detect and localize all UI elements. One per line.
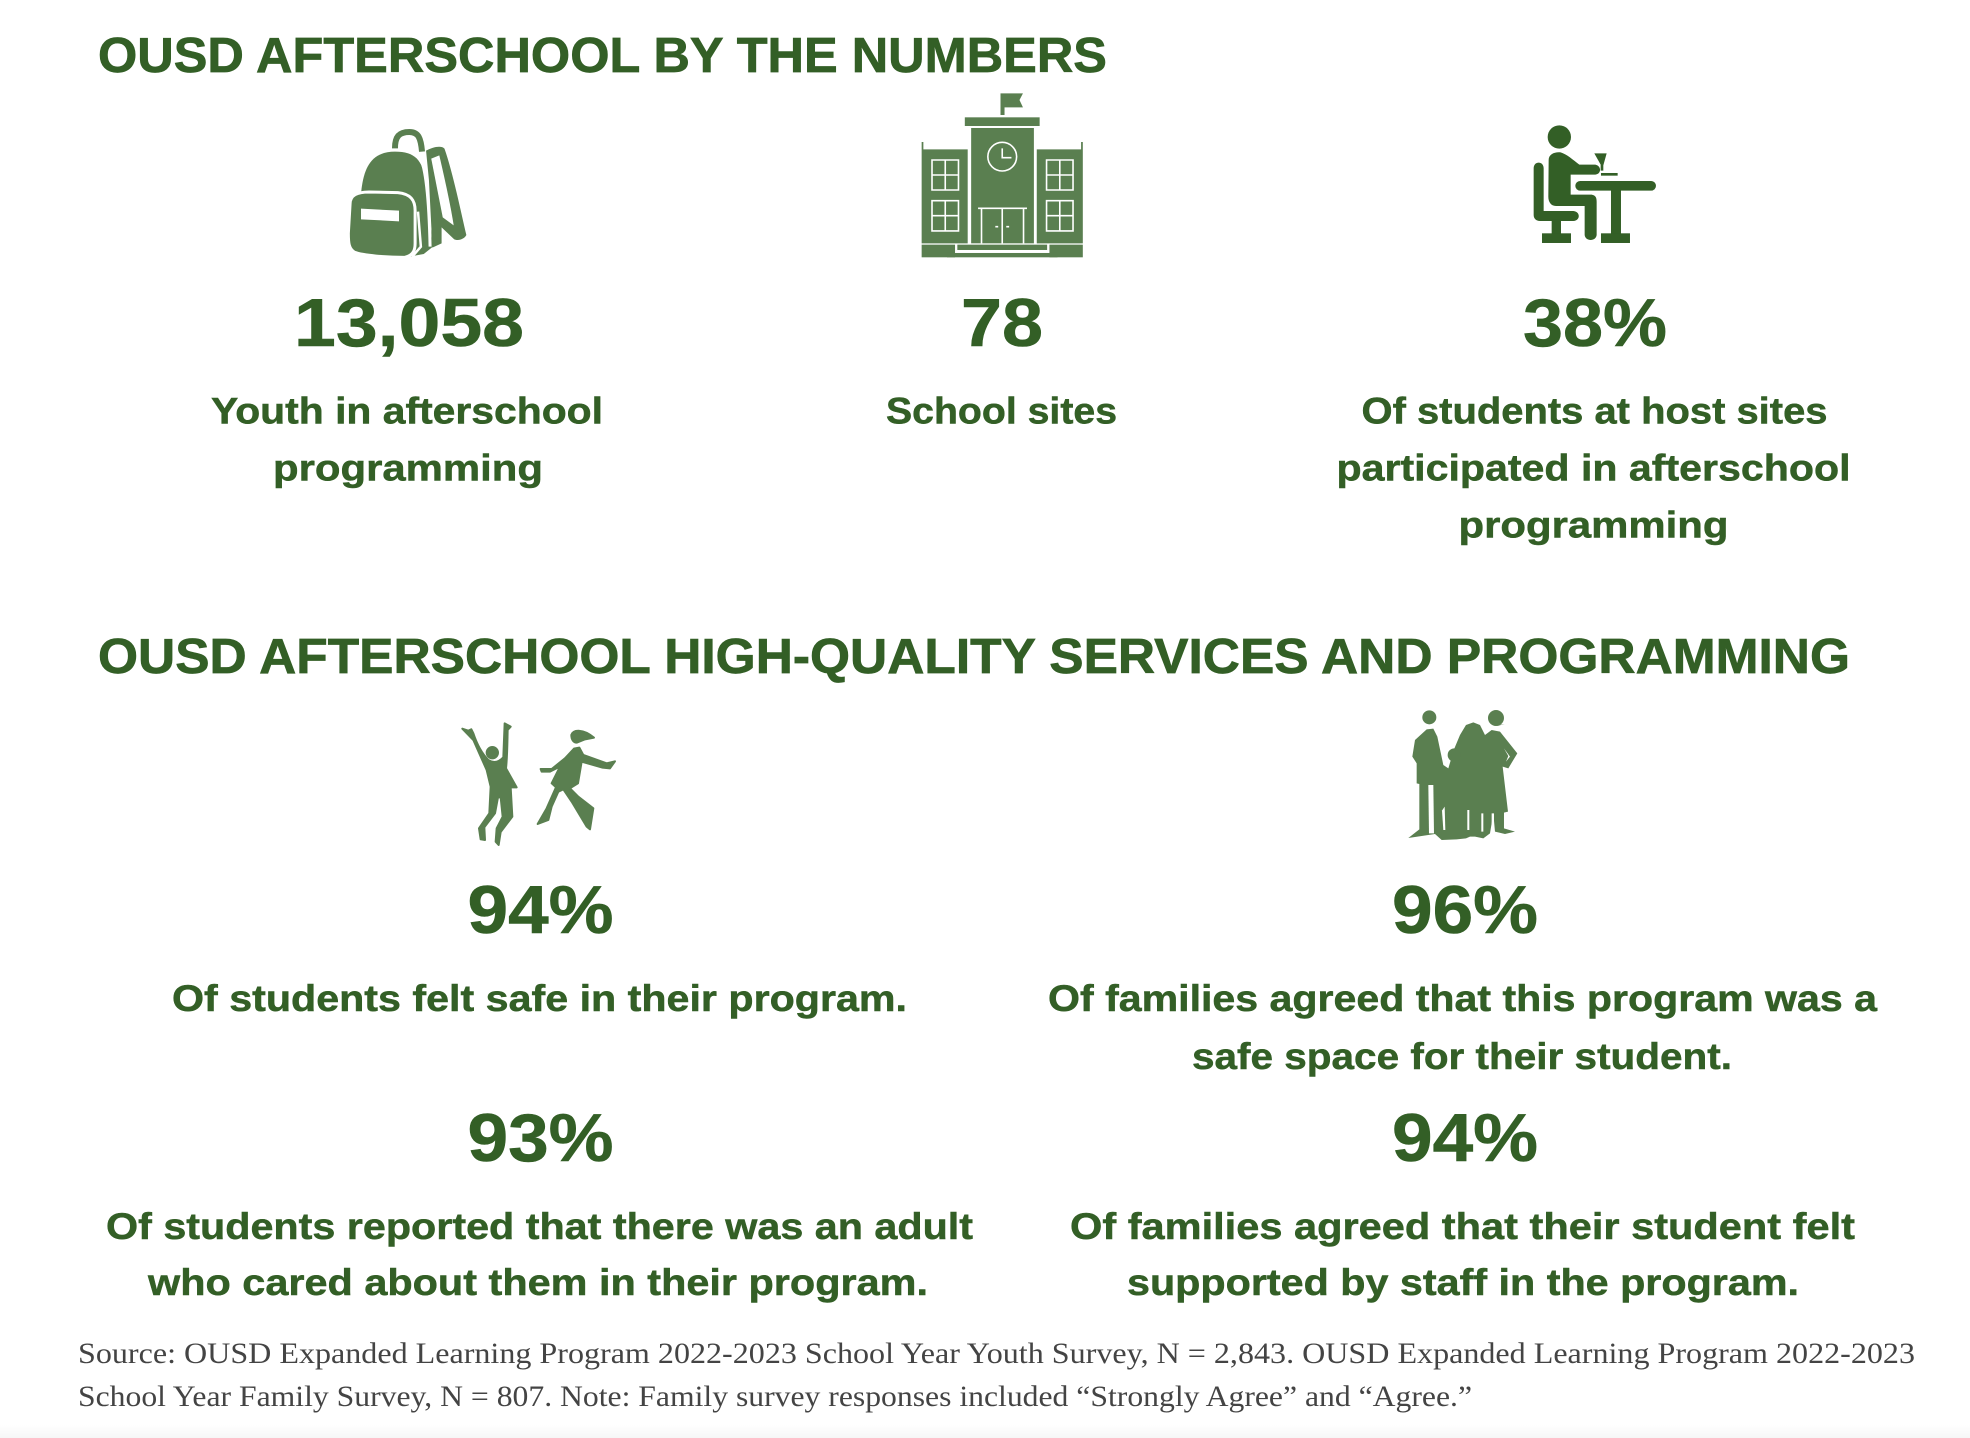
label: safe space bbox=[1048, 978, 1877, 1077]
panel: school sites bbox=[886, 93, 1117, 432]
stat: 96%: 96% bbox=[1392, 872, 1538, 948]
label: supported by staff: supported by staff in the program. bbox=[1127, 1262, 1799, 1303]
icon: person at desk bbox=[1534, 125, 1656, 243]
icon: jumping children bbox=[462, 723, 615, 845]
panel: host site participation bbox=[1336, 125, 1850, 545]
icon: family silhouette bbox=[1408, 710, 1517, 840]
label: of students at host sites: participated in afterschool bbox=[1336, 448, 1850, 488]
label: school sites: School sites bbox=[886, 390, 1117, 432]
icon: school building bbox=[922, 93, 1083, 257]
label: safe space: safe space for their student. bbox=[1192, 1036, 1732, 1077]
panel: students bbox=[106, 723, 973, 1303]
icon: backpack bbox=[348, 132, 466, 257]
label: adult who cared bbox=[106, 1206, 973, 1303]
label: of students at host sites: Of students at host sites bbox=[1362, 390, 1828, 432]
stat: 38%: 38% bbox=[1523, 285, 1667, 361]
panel: youth in afterschool bbox=[211, 132, 603, 488]
source note: School Year Family Survey, N = 807. Note: Family survey responses included “Strongly Agree” and “Agree.” bbox=[78, 1380, 1472, 1413]
stat: 94%: 94% bbox=[1392, 1100, 1538, 1176]
title: services and programming: OUSD AFTERSCHOOL HIGH-QUALITY SERVICES AND PROGRAMMING bbox=[98, 630, 1850, 684]
stat: 13,058: 13,058 bbox=[294, 285, 524, 361]
label: felt safe: Of students felt safe in their program. bbox=[172, 978, 907, 1019]
label: supported by staff: Of families agreed that their student felt bbox=[1070, 1206, 1855, 1247]
label: of students at host sites bbox=[1336, 390, 1850, 546]
label: supported by staff bbox=[1070, 1206, 1855, 1303]
label: youth in afterschool programming: programming bbox=[273, 448, 543, 488]
label: youth in afterschool programming: Youth in afterschool bbox=[211, 390, 603, 432]
stat: 93%: 93% bbox=[468, 1100, 614, 1176]
stat: 78: 78 bbox=[961, 285, 1043, 361]
label: adult who cared: Of students reported that there was an adult bbox=[106, 1206, 973, 1247]
label: adult who cared: who cared about them in their program. bbox=[147, 1262, 928, 1303]
source note bbox=[78, 1337, 1915, 1413]
panel: families bbox=[1048, 710, 1877, 1303]
label: youth in afterschool programming bbox=[211, 390, 603, 488]
label: safe space: Of families agreed that this program was a bbox=[1048, 978, 1877, 1019]
source note: Source: OUSD Expanded Learning Program 2022-2023 School Year Youth Survey, N = 2,843. OUSD Expanded Learning Program 2022-2023 bbox=[78, 1337, 1915, 1370]
title: by the numbers: OUSD AFTERSCHOOL BY THE NUMBERS bbox=[98, 29, 1107, 83]
stat: 94%: 94% bbox=[468, 872, 614, 948]
label: of students at host sites: programming bbox=[1458, 504, 1728, 546]
